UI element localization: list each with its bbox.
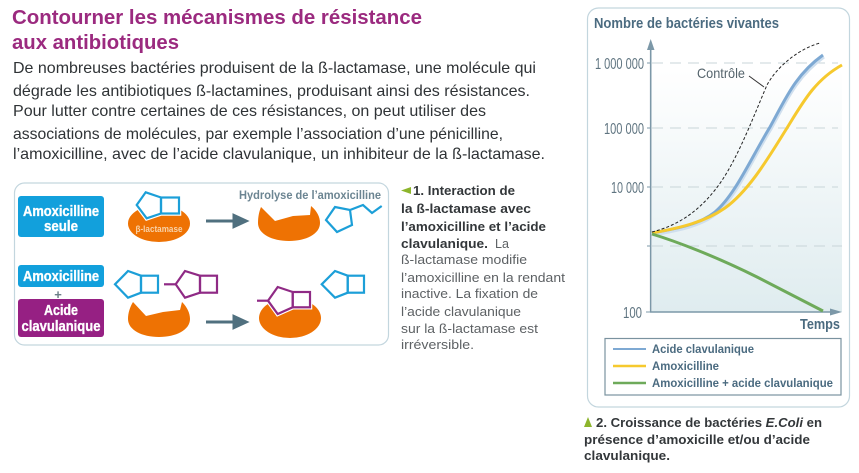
- y labels: 1 000 000: [595, 56, 644, 73]
- curve: acide clavulanique: [652, 55, 823, 233]
- title: Contourner les mécanismes de résistance: [12, 7, 422, 29]
- enzyme with clavulanic acid: [257, 287, 321, 338]
- curve shadow: [653, 57, 824, 235]
- caption 1: sur la ß-lactamase est: [401, 322, 539, 336]
- caption 1: ß-lactamase modifie: [401, 253, 527, 267]
- legend: Amoxicilline: [652, 359, 719, 373]
- label: acide clavulanique: Acide: [44, 302, 78, 319]
- intro text: Pour lutter contre certaines de ces résistances, on peut utiliser des: [13, 103, 486, 120]
- caption 1: inactive. La fixation de: [401, 287, 538, 301]
- intro text: De nombreuses bactéries produisent de la ß-lactamase, une molécule qui: [13, 60, 536, 77]
- caption 1: [401, 184, 566, 352]
- intro text: [13, 60, 545, 163]
- caption 1: l’amoxicilline en la rendant: [401, 271, 566, 285]
- legend: Acide clavulanique: [652, 342, 754, 356]
- y axis: [646, 39, 654, 312]
- caption 1: La: [495, 237, 509, 251]
- free amoxicillin molecule: [322, 271, 364, 298]
- legend: [605, 338, 841, 395]
- control label: [697, 65, 764, 87]
- title: [12, 7, 422, 54]
- panel: growth chart: [588, 8, 850, 407]
- y labels: 100 000: [604, 121, 644, 138]
- intro text: associations de molécules, par exemple l’association d’une pénicilline,: [13, 126, 503, 143]
- intro text: dégrade les antibiotiques ß-lactamines, produisant ainsi des résistances.: [13, 83, 530, 100]
- clavulanic acid molecule: [164, 271, 217, 298]
- curve: amoxicilline + acide clavulanique: [652, 234, 823, 311]
- label: amoxicilline: Amoxicilline: [23, 268, 99, 285]
- free enzyme: [128, 302, 190, 337]
- caption 2: clavulanique.: [584, 449, 670, 463]
- caption 1: clavulanique.: [401, 237, 488, 251]
- caption 1: l’amoxicilline et l’acide: [401, 220, 546, 234]
- label: amoxicilline: [18, 265, 104, 287]
- title: aux antibiotiques: [12, 32, 179, 54]
- label: acide clavulanique: [18, 299, 104, 337]
- label: amoxicilline seule: [18, 196, 104, 237]
- panel: mechanism diagram: [14, 183, 388, 345]
- caption 2: présence d’amoxicille et/ou d’acide: [584, 433, 810, 447]
- caption 2: 2. Croissance de bactéries E.Coli en: [596, 416, 822, 430]
- x axis: [650, 308, 842, 316]
- arrow: [206, 216, 246, 226]
- control label: Contrôle: [697, 65, 745, 81]
- caption 2: [584, 416, 822, 463]
- curve: contrôle: [652, 43, 820, 232]
- enzyme with amoxicillin: [128, 192, 190, 242]
- label: acide clavulanique: clavulanique: [22, 318, 100, 335]
- enzyme with amoxicillin: β-lactamase: [136, 224, 182, 235]
- intro text: l’amoxicilline, avec de l’acide clavulanique, un inhibiteur de la ß-lactamase.: [13, 146, 545, 163]
- y labels: 100: [623, 305, 642, 322]
- curve: amoxicilline: [652, 65, 842, 233]
- label: amoxicilline seule: Amoxicilline: [23, 203, 99, 220]
- y labels: 10 000: [611, 180, 644, 197]
- legend: Amoxicilline + acide clavulanique: [652, 376, 833, 390]
- arrow: [206, 316, 246, 328]
- hydrolysed amoxicillin: [326, 205, 382, 232]
- caption 1: irréversible.: [401, 338, 474, 352]
- x label: Temps: [800, 316, 840, 333]
- chart heading: Nombre de bactéries vivantes: [594, 15, 779, 32]
- plus sign: +: [54, 287, 62, 302]
- plot background: [652, 70, 842, 312]
- label: amoxicilline seule: seule: [44, 218, 78, 235]
- y labels: [595, 56, 644, 322]
- enzyme after hydrolysis: [258, 206, 320, 241]
- grid lines: [652, 63, 842, 246]
- caption 1: l’acide clavulanique: [401, 305, 521, 319]
- caption 1: la ß-lactamase avec: [401, 202, 531, 216]
- caption 1: 1. Interaction de: [413, 184, 515, 198]
- amoxicillin molecule: [115, 271, 158, 298]
- hydrolysis label: Hydrolyse de l’amoxicilline: [239, 188, 381, 202]
